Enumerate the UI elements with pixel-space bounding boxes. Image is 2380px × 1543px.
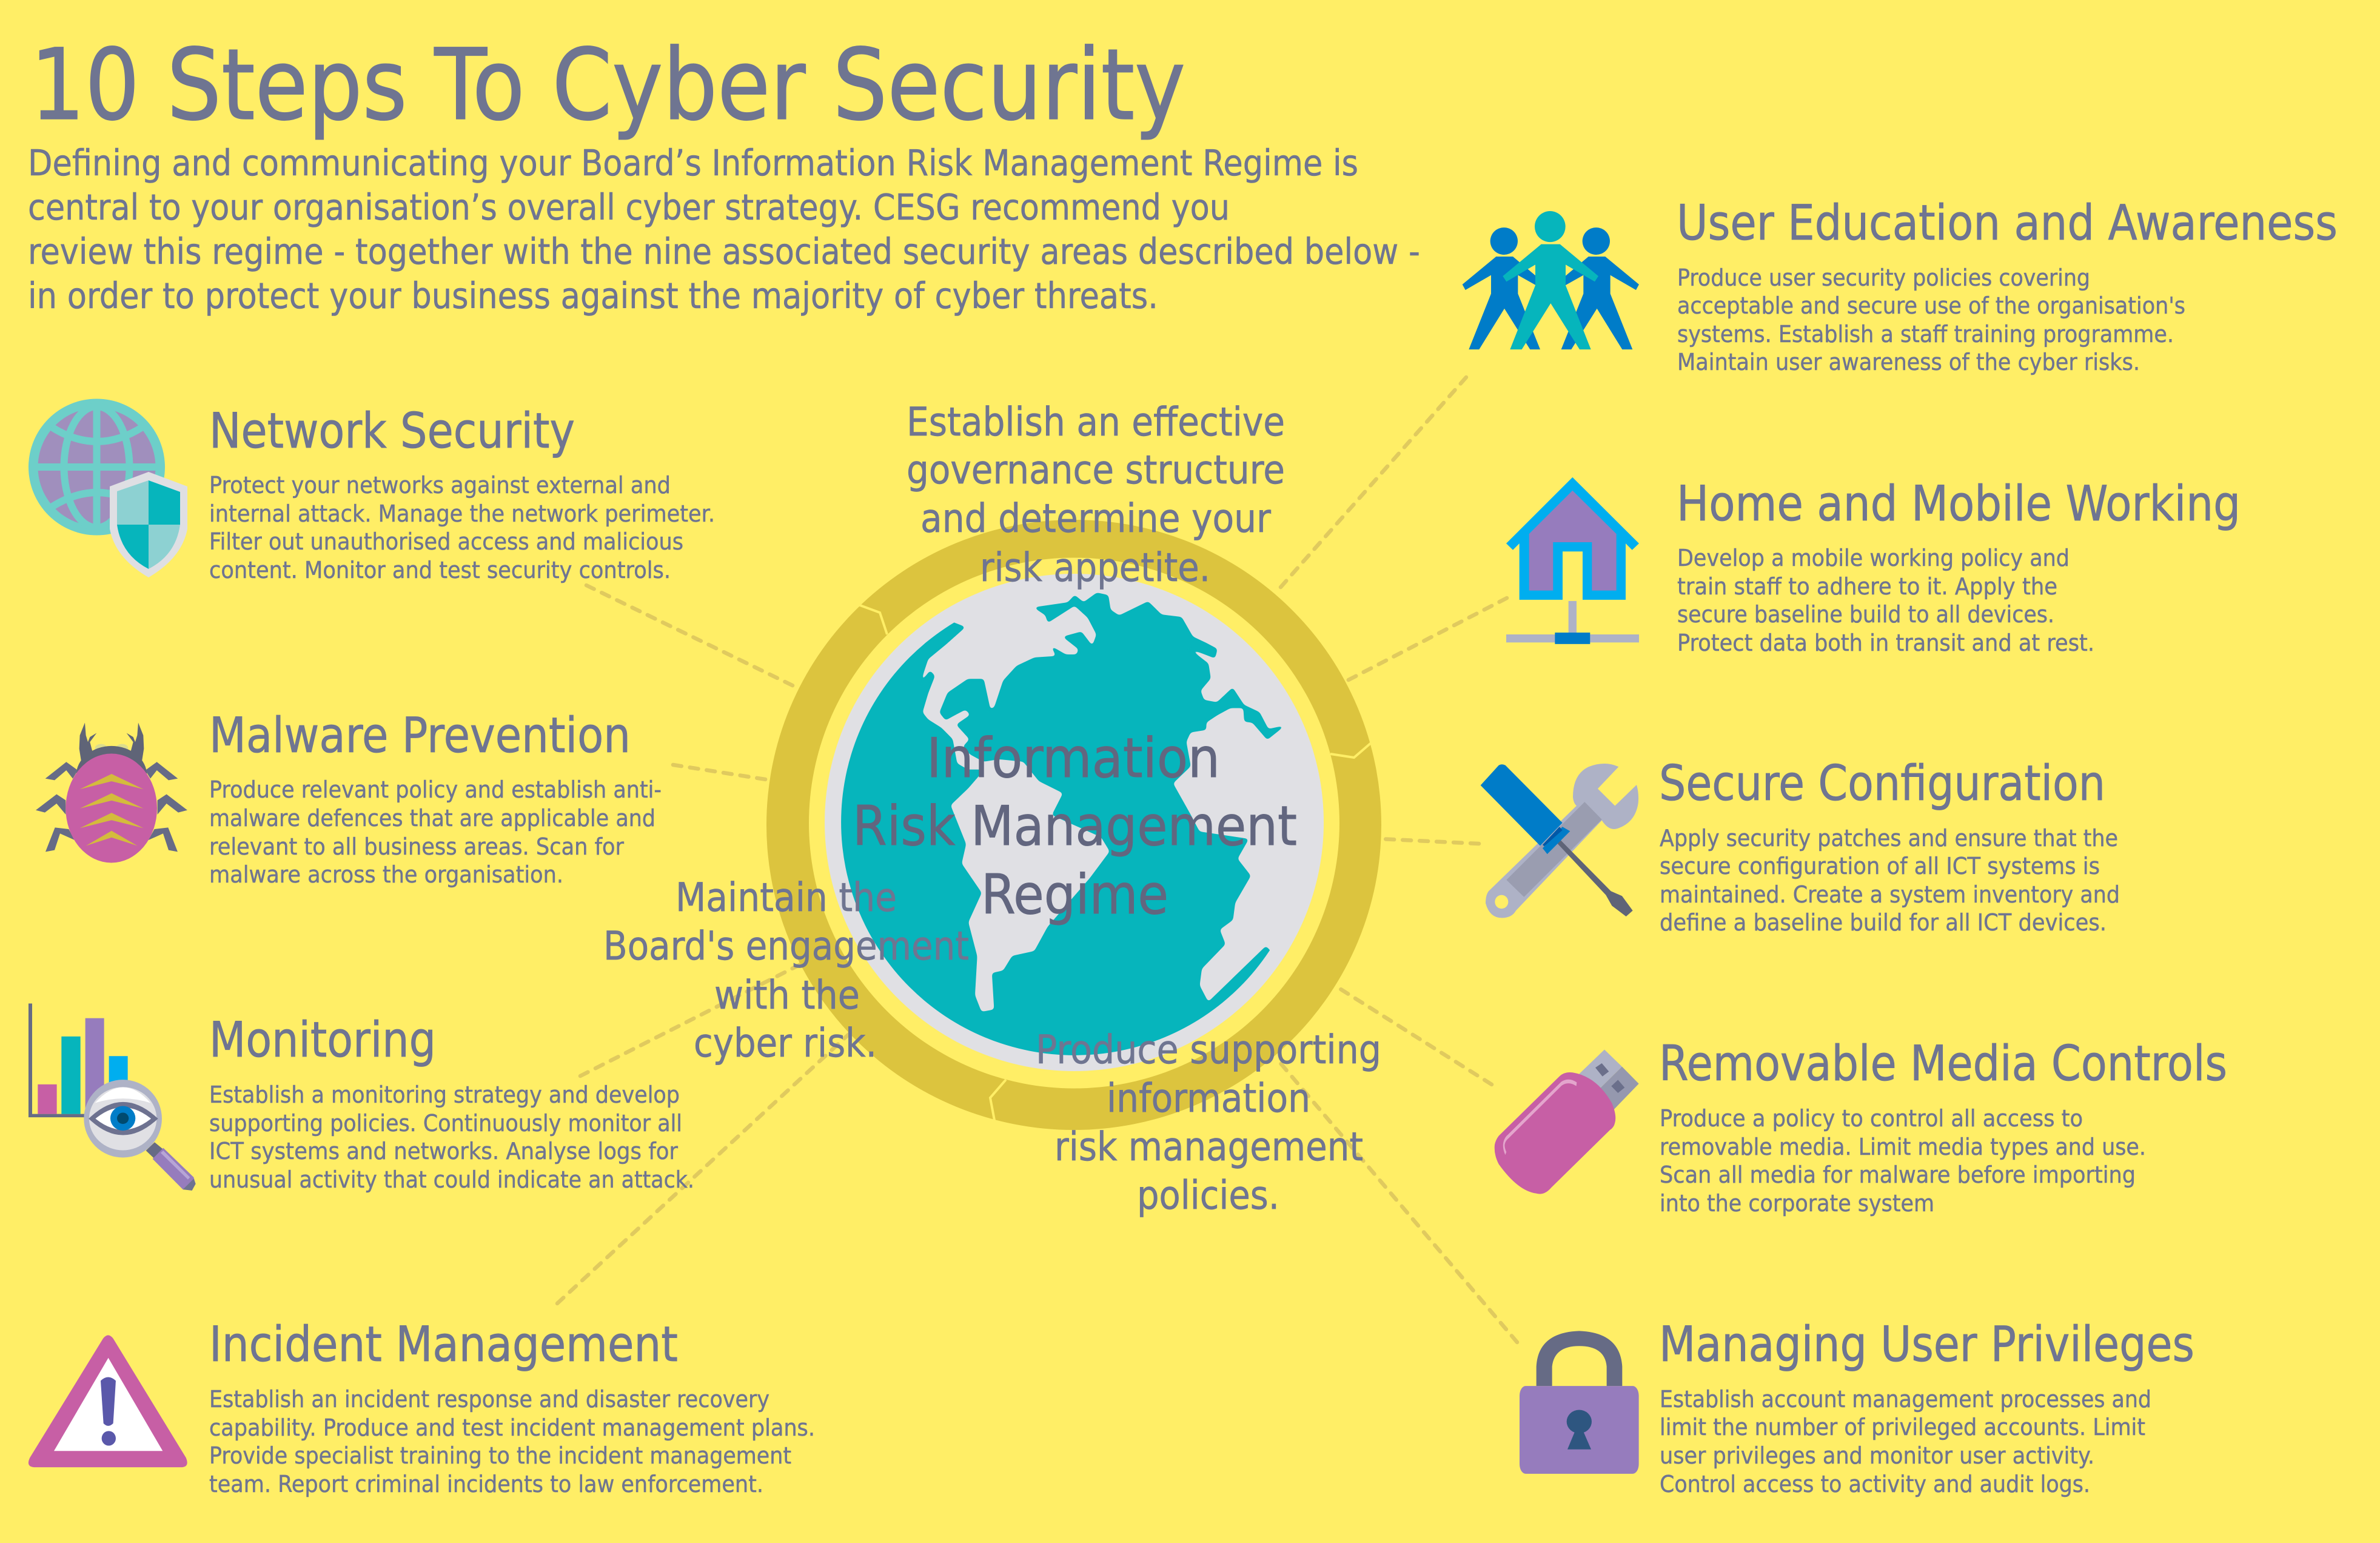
panel: malware prevention xyxy=(36,707,662,889)
heading: Incident Management xyxy=(209,1316,678,1373)
callout: board engagement: cyber risk. xyxy=(694,1021,877,1066)
callout: governance: Establish an effective xyxy=(907,400,1285,445)
callout: board engagement: Board's engagement xyxy=(603,924,969,969)
globe disc xyxy=(825,574,1324,1071)
callout: board engagement: Maintain the xyxy=(675,875,897,921)
description: user privileges and monitor user activity. xyxy=(1660,1442,2094,1470)
description xyxy=(209,776,662,889)
callout: governance: governance structure xyxy=(907,448,1285,493)
panel: removable media controls xyxy=(1495,1035,2227,1217)
icon: house on network xyxy=(1506,477,1639,644)
description: internal attack. Manage the network perimeter. xyxy=(209,500,715,528)
panel: secure configuration xyxy=(1481,755,2120,936)
heading: Network Security xyxy=(209,403,575,459)
description: supporting policies. Continuously monitor all xyxy=(209,1110,682,1137)
description: relevant to all business areas. Scan for xyxy=(209,833,624,861)
heading: Secure Configuration xyxy=(1659,755,2105,812)
callout: governance: and determine your xyxy=(920,496,1271,542)
description: team. Report criminal incidents to law enforcement. xyxy=(209,1471,763,1498)
icon: three people xyxy=(1463,211,1639,349)
panel: user education xyxy=(1463,195,2338,376)
central globe and ring xyxy=(766,520,1381,1130)
description: ICT systems and networks. Analyse logs for xyxy=(209,1138,678,1165)
globe oceans xyxy=(841,593,1282,1055)
description: Maintain user awareness of the cyber risks. xyxy=(1677,349,2140,376)
icon: USB stick xyxy=(1495,1049,1639,1194)
description: Develop a mobile working policy and xyxy=(1677,545,2070,572)
description xyxy=(1677,545,2094,657)
description: unusual activity that could indicate an attack. xyxy=(209,1166,694,1194)
gold ring xyxy=(766,520,1381,1130)
description: Protect data both in transit and at rest. xyxy=(1677,630,2094,657)
description: Produce relevant policy and establish anti- xyxy=(209,776,662,804)
description: systems. Establish a staff training programme. xyxy=(1677,321,2174,348)
description xyxy=(1660,1386,2151,1498)
panel: network security xyxy=(28,399,715,584)
description: Filter out unauthorised access and malicious xyxy=(209,528,683,556)
description xyxy=(1677,264,2185,376)
description: Apply security patches and ensure that the xyxy=(1660,825,2118,852)
heading: Home and Mobile Working xyxy=(1677,476,2241,532)
icon: globe with shield xyxy=(28,399,187,577)
description: malware across the organisation. xyxy=(209,861,563,889)
description: maintained. Create a system inventory and xyxy=(1660,881,2120,909)
callout: governance: risk appetite. xyxy=(980,545,1210,591)
callout: governance xyxy=(907,400,1285,591)
callout: policies: Produce supporting xyxy=(1036,1027,1381,1073)
description xyxy=(209,1386,815,1498)
intro paragraph: Defining and communicating your Board’s Information Risk Management Regime is xyxy=(28,142,1358,184)
callout: policies xyxy=(1036,1027,1381,1219)
description: Produce a policy to control all access to xyxy=(1660,1105,2083,1132)
icon: padlock xyxy=(1520,1331,1639,1474)
icon: chart with magnifier xyxy=(28,1004,196,1191)
dashed connector lines xyxy=(557,377,1517,1342)
description: removable media. Limit media types and use. xyxy=(1660,1134,2146,1161)
heading: Managing User Privileges xyxy=(1659,1316,2194,1373)
callout: board engagement: with the xyxy=(714,973,860,1018)
description: Establish a monitoring strategy and develop xyxy=(209,1081,680,1109)
description: acceptable and secure use of the organisation's xyxy=(1677,292,2185,320)
central label: Information xyxy=(927,727,1220,790)
description: Protect your networks against external and xyxy=(209,472,671,499)
description xyxy=(209,472,715,584)
description: Control access to activity and audit logs. xyxy=(1660,1471,2090,1498)
central label: Risk Management xyxy=(853,795,1297,858)
description: Establish account management processes and xyxy=(1660,1386,2151,1413)
description: secure baseline build to all devices. xyxy=(1677,601,2054,628)
heading: Malware Prevention xyxy=(209,707,631,764)
description xyxy=(1660,825,2120,936)
description: limit the number of privileged accounts. Limit xyxy=(1660,1414,2145,1441)
description: into the corporate system xyxy=(1660,1190,1934,1217)
central label: Regime xyxy=(981,863,1168,927)
intro paragraph: in order to protect your business against the majority of cyber threats. xyxy=(28,275,1158,317)
description: define a baseline build for all ICT devices. xyxy=(1660,909,2107,936)
heading: Removable Media Controls xyxy=(1659,1035,2227,1092)
title: 10 Steps To Cyber Security xyxy=(30,29,1185,143)
callout: board engagement xyxy=(603,875,969,1066)
icon: wrench and screwdriver xyxy=(1481,764,1638,918)
description: train staff to adhere to it. Apply the xyxy=(1677,573,2057,600)
callout: policies: information xyxy=(1107,1076,1310,1121)
heading: Monitoring xyxy=(209,1012,436,1068)
intro paragraph: central to your organisation’s overall cyber strategy. CESG recommend you xyxy=(28,186,1230,228)
ring segment notches xyxy=(857,604,1372,1120)
callout: policies: policies. xyxy=(1137,1173,1279,1219)
icon: warning triangle xyxy=(28,1335,187,1467)
icon: bug xyxy=(36,723,187,862)
intro paragraph xyxy=(28,142,1420,317)
description: Provide specialist training to the incident management xyxy=(209,1442,791,1470)
panel: monitoring xyxy=(28,1004,694,1194)
description: capability. Produce and test incident management plans. xyxy=(209,1414,815,1442)
description: malware defences that are applicable and xyxy=(209,805,655,832)
description: secure configuration of all ICT systems is xyxy=(1660,853,2100,880)
central label xyxy=(853,727,1297,927)
description: Produce user security policies covering xyxy=(1677,264,2090,292)
intro paragraph: review this regime - together with the nine associated security areas described below - xyxy=(28,230,1420,272)
description xyxy=(209,1081,694,1194)
panel: managing user privileges xyxy=(1520,1316,2194,1498)
panel: incident management xyxy=(28,1316,815,1498)
description: content. Monitor and test security controls. xyxy=(209,557,671,584)
callout: policies: risk management xyxy=(1054,1124,1363,1170)
description xyxy=(1660,1105,2146,1217)
panel: home and mobile working xyxy=(1506,476,2241,657)
description: Establish an incident response and disaster recovery xyxy=(209,1386,769,1413)
description: Scan all media for malware before importing xyxy=(1660,1161,2136,1189)
